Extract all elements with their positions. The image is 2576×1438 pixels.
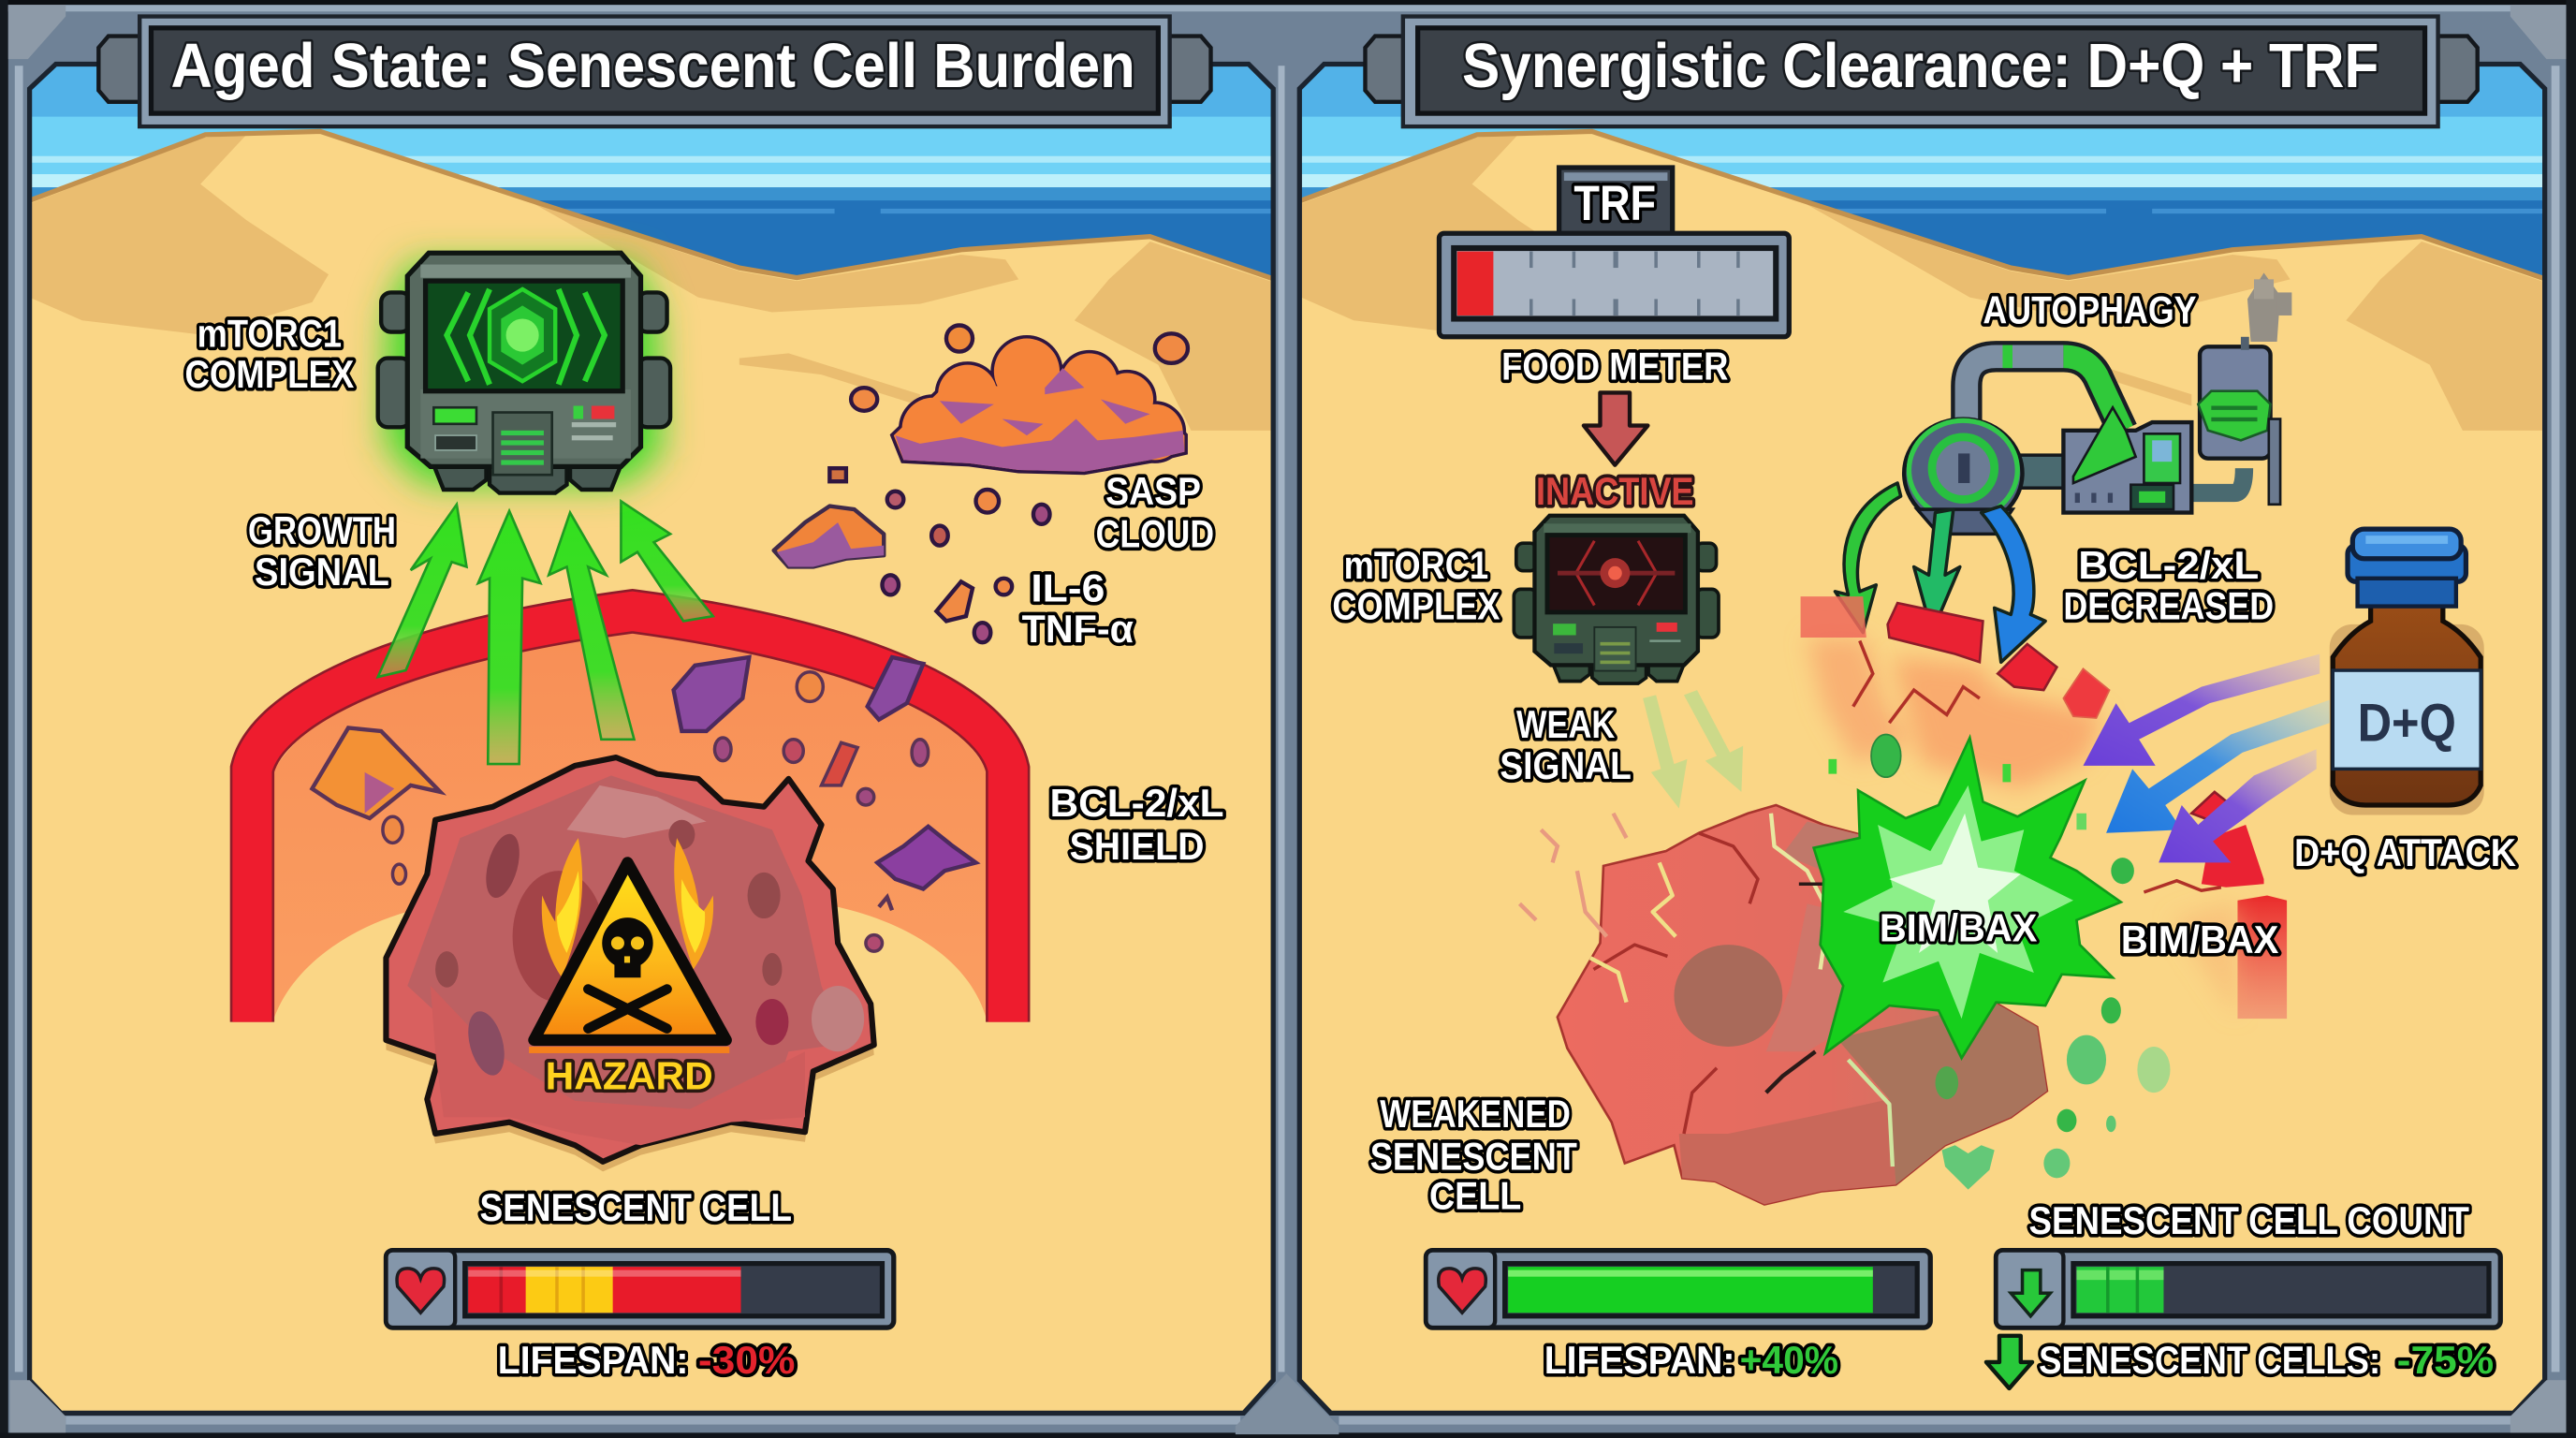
autophagy label: AUTOPHAGY bbox=[1983, 288, 2197, 332]
title plate: aged state bbox=[98, 17, 1211, 126]
fading cell debris bbox=[1519, 814, 1627, 936]
label: weak signal bbox=[1500, 702, 1632, 787]
label: weakened senescent cell bbox=[1370, 1092, 1577, 1218]
lifespan value, treated: LIFESPAN: bbox=[1544, 1338, 1734, 1382]
broken shield bbox=[1801, 596, 2287, 1019]
label: BCL-2/xL decreased: DECREASED bbox=[2063, 584, 2274, 628]
label: BCL-2/xL decreased: BCL-2/xL bbox=[2078, 543, 2259, 587]
weakened senescent cell bbox=[1519, 805, 2047, 1204]
label: weak signal: SIGNAL bbox=[1500, 743, 1632, 787]
senescent cell count bar bbox=[1996, 1251, 2500, 1328]
label: cytokines: TNF-α bbox=[1022, 607, 1134, 651]
label: SASP cloud: CLOUD bbox=[1096, 511, 1214, 555]
particles bbox=[829, 325, 1188, 642]
label: BCL-2/xL decreased bbox=[2063, 543, 2274, 628]
food meter bbox=[1439, 233, 1789, 337]
autophagy arrows bbox=[1835, 483, 2045, 662]
D+Q attack arrows bbox=[2083, 654, 2330, 862]
device screen bbox=[1547, 536, 1685, 612]
lifespan value, aged: -30% bbox=[698, 1338, 795, 1382]
feet bbox=[431, 444, 624, 493]
label: mTORC1 complex, right: COMPLEX bbox=[1332, 584, 1500, 628]
lifespan bar, aged bbox=[386, 1251, 894, 1328]
pipe loop bbox=[1967, 357, 2123, 431]
device body bbox=[407, 253, 640, 466]
BCL-2/xL shield arch bbox=[252, 611, 1008, 1022]
BIM/BAX burst bbox=[1814, 738, 2121, 1058]
lifespan value, aged bbox=[498, 1338, 795, 1382]
label: SASP cloud: SASP bbox=[1105, 469, 1201, 513]
label: SASP cloud bbox=[1096, 469, 1214, 555]
icon: hazard triangle with flames bbox=[529, 838, 729, 1053]
nucleus bbox=[1674, 945, 1782, 1047]
TRF tag: TRF bbox=[1573, 176, 1656, 231]
label: growth signal: GROWTH bbox=[248, 508, 396, 552]
bar fill bbox=[1508, 1267, 1873, 1313]
gear bbox=[1904, 419, 2023, 527]
debris inside shield bbox=[312, 657, 976, 951]
label: D+Q attack: D+Q ATTACK bbox=[2294, 830, 2516, 874]
icon: heart bbox=[397, 1269, 445, 1313]
side knobs bbox=[378, 292, 670, 427]
cracks bbox=[1590, 814, 1893, 1167]
autophagy machine bbox=[1904, 272, 2291, 534]
label: growth signal bbox=[248, 508, 396, 594]
tank bbox=[2200, 346, 2271, 459]
device screen bbox=[426, 281, 622, 391]
icon: senescent cells down arrow bbox=[1986, 1336, 2032, 1388]
lifespan value, aged: LIFESPAN: bbox=[498, 1338, 688, 1382]
bar fill bbox=[2076, 1267, 2163, 1313]
SASP cloud bbox=[774, 325, 1188, 642]
green cell fragments bbox=[1828, 734, 2170, 1190]
senescent cells value: -75% bbox=[2397, 1338, 2494, 1382]
lifespan bar, treated bbox=[1426, 1251, 1930, 1328]
label: mTORC1 complex bbox=[184, 311, 354, 396]
small cloud bbox=[774, 506, 884, 566]
bottle cap bbox=[2348, 529, 2466, 607]
label: food meter: FOOD METER bbox=[1501, 344, 1728, 388]
label: BCL-2/xL shield: BCL-2/xL bbox=[1050, 781, 1224, 825]
label: weak signal: WEAK bbox=[1516, 702, 1616, 746]
label: senescent cell count: SENESCENT CELL COUNT bbox=[2029, 1198, 2469, 1242]
mTORC1 complex, active bbox=[378, 253, 670, 493]
label: weakened senescent cell: SENESCENT bbox=[1370, 1135, 1577, 1179]
icon: heart bbox=[1439, 1269, 1486, 1313]
lifespan value, treated bbox=[1544, 1338, 1838, 1382]
bar fill bbox=[468, 1267, 741, 1313]
burst label: BIM/BAX bbox=[1880, 906, 2037, 950]
hazard label: HAZARD bbox=[546, 1054, 713, 1098]
base unit bbox=[2063, 422, 2191, 513]
senescent cells value: SENESCENT CELLS: bbox=[2039, 1338, 2380, 1382]
label: weakened senescent cell: CELL bbox=[1429, 1174, 1521, 1218]
icon: skull and crossbones bbox=[588, 917, 667, 1029]
panel background: sky, sea and dunes, left bbox=[30, 59, 1275, 1419]
TRF tag bbox=[1559, 168, 1673, 237]
label: mTORC1 complex, right: mTORC1 bbox=[1344, 543, 1488, 587]
panel background: sky, sea and dunes, right bbox=[1301, 59, 2546, 1419]
mTORC1 complex, inactive bbox=[1514, 516, 1719, 683]
weak signal arrows bbox=[1643, 690, 1743, 808]
title plate: synergistic clearance bbox=[1365, 17, 2478, 126]
label: BCL-2/xL shield bbox=[1050, 781, 1224, 868]
label: BIM/BAX: BIM/BAX bbox=[2121, 917, 2278, 961]
icon: down arrow bbox=[2011, 1270, 2050, 1316]
label: inactive: INACTIVE bbox=[1536, 469, 1694, 513]
lifespan value, treated: +40% bbox=[1740, 1338, 1838, 1382]
device controls bbox=[1553, 623, 1680, 671]
title text: Aged State: Senescent Cell Burden bbox=[171, 32, 1135, 101]
label: weakened senescent cell: WEAKENED bbox=[1380, 1092, 1571, 1136]
smoke bbox=[2247, 272, 2291, 342]
senescent cell bbox=[386, 757, 874, 1171]
label: mTORC1 complex: mTORC1 bbox=[198, 311, 342, 355]
D+Q bottle: D+Q bbox=[2358, 694, 2456, 754]
lower pipe bbox=[2188, 468, 2244, 493]
label: growth signal: SIGNAL bbox=[255, 550, 389, 594]
meter level bbox=[1457, 252, 1493, 315]
growth signal arrows bbox=[378, 501, 713, 764]
label: BCL-2/xL shield: SHIELD bbox=[1070, 824, 1204, 868]
device body bbox=[1534, 516, 1698, 665]
label: mTORC1 complex, right bbox=[1332, 543, 1500, 628]
arrow: food meter to mTORC1 bbox=[1584, 392, 1647, 465]
label: senescent cell: SENESCENT CELL bbox=[479, 1185, 792, 1229]
label: cytokines bbox=[1022, 565, 1134, 651]
label: mTORC1 complex: COMPLEX bbox=[184, 352, 354, 396]
title text: Synergistic Clearance: D+Q + TRF bbox=[1462, 32, 2378, 101]
bottle label bbox=[2333, 670, 2481, 769]
label: cytokines: IL-6 bbox=[1031, 565, 1105, 609]
D+Q bottle bbox=[2330, 529, 2484, 814]
device controls bbox=[433, 405, 616, 475]
